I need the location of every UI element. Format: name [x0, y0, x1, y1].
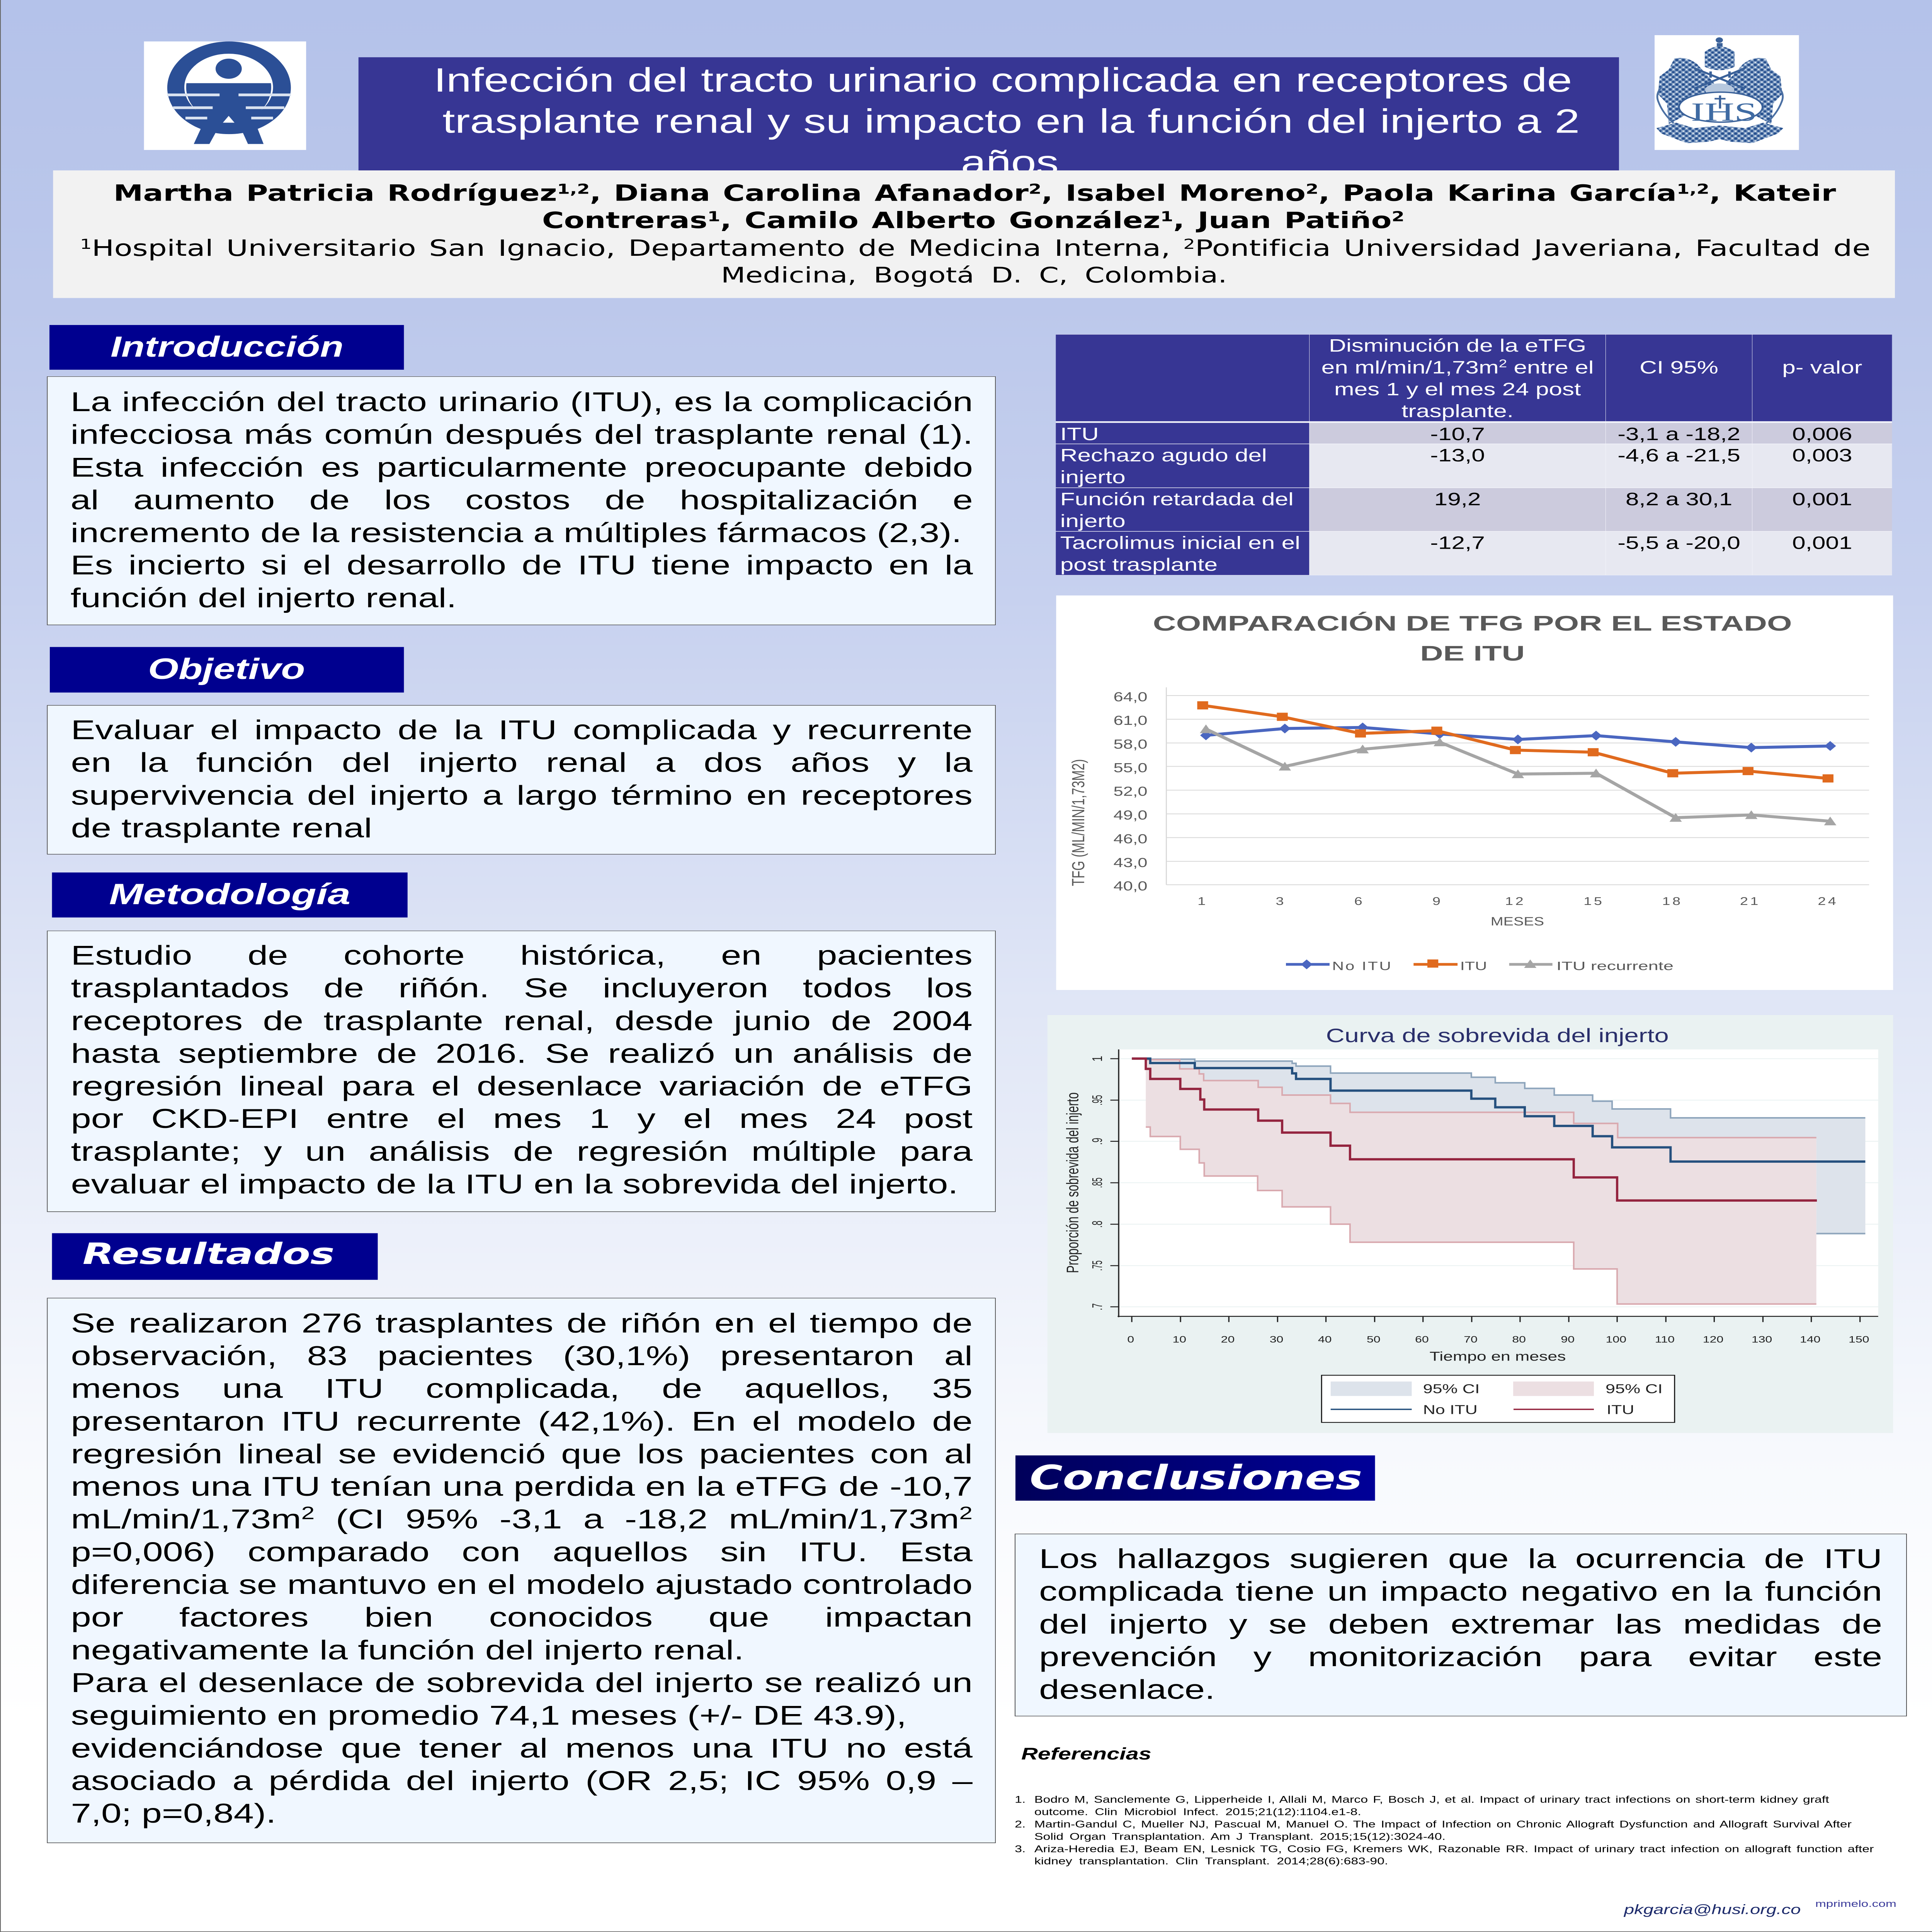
resultados text: observación, 83 pacientes (30,1%) presentaron al — [71, 1340, 973, 1371]
table: disminución de la eTFG: 0,001 — [1792, 489, 1852, 509]
table: disminución de la eTFG: Disminución de la eTFG — [1329, 335, 1586, 355]
table: disminución de la eTFG: Rechazo agudo del — [1060, 445, 1267, 465]
resultados text — [71, 1307, 973, 1830]
survival x tick labels: 60 — [1415, 1334, 1429, 1345]
y axis tick labels: 58,0 — [1114, 737, 1148, 752]
objetivo text: supervivencia del injerto a largo término en receptores — [71, 780, 973, 811]
table: disminución de la eTFG: mes 1 y el mes 24 post — [1334, 379, 1581, 399]
conclusiones text: complicada tiene un impacto negativo en la función — [1039, 1576, 1882, 1607]
x axis title: MESES — [1491, 915, 1544, 928]
y axis tick labels: 55,0 — [1114, 761, 1148, 775]
table: disminución de la eTFG: p- valor — [1782, 357, 1862, 378]
survival y tick labels: .7 — [1089, 1303, 1105, 1310]
objetivo text: Evaluar el impacto de la ITU complicada y recurrente — [71, 714, 973, 745]
survival y tick labels — [1089, 1056, 1105, 1310]
x axis tick labels: 21 — [1740, 895, 1760, 908]
y axis tick labels: 46,0 — [1114, 832, 1148, 846]
references list: 3. — [1015, 1843, 1026, 1854]
survival y tick labels: .85 — [1089, 1178, 1105, 1188]
resultados text: mL/min/1,73m2 (CI 95% -3,1 a -18,2 mL/min/1,73m2 — [71, 1503, 973, 1534]
survival x tick labels: 10 — [1173, 1334, 1186, 1345]
row: rechazo agudo — [1056, 334, 1892, 335]
introducción text: infecciosa más común después del trasplante renal (1). — [71, 419, 973, 450]
table: disminución de la eTFG: -12,7 — [1430, 532, 1485, 553]
metodología text: trasplante; y un análisis de regresión múltiple para — [71, 1136, 973, 1167]
survival legend — [1321, 1375, 1675, 1422]
reference 3 — [1015, 1793, 1895, 1794]
logo: Pontificia Universidad Javeriana crest: IHS — [1691, 98, 1757, 127]
table: disminución de la eTFG: -10,7 — [1430, 424, 1485, 444]
row: tacrolimus — [1056, 334, 1892, 335]
survival x tick labels: 30 — [1270, 1334, 1283, 1345]
survival x tick labels — [1127, 1334, 1869, 1345]
survival x tick labels: 90 — [1561, 1334, 1575, 1345]
series: ITU recurrente — [1206, 729, 1830, 821]
title banner — [359, 57, 1619, 170]
survival y tick labels: .8 — [1089, 1221, 1105, 1228]
chart title: DE ITU — [1420, 641, 1525, 665]
references list: 2. — [1015, 1818, 1026, 1830]
conclusiones text: prevención y monitorización para evitar este — [1039, 1641, 1882, 1672]
survival x tick labels: 100 — [1606, 1334, 1626, 1345]
metodología text — [71, 939, 973, 1201]
metodología text: Estudio de cohorte histórica, en pacientes — [71, 940, 973, 971]
objetivo text: en la función del injerto renal a dos años y la — [71, 747, 973, 778]
survival x tick labels: 140 — [1800, 1334, 1820, 1345]
table: disminución de la eTFG: 0,003 — [1792, 445, 1852, 465]
table: disminución de la eTFG: injerto — [1060, 467, 1126, 487]
metodología text: evaluar el impacto de la ITU en la sobrevida del injerto. — [71, 1169, 958, 1199]
authors and affiliations: Contreras1, Camilo Alberto González1, Juan Patiño2 — [542, 207, 1405, 233]
table: disminución de la eTFG: 0,001 — [1792, 532, 1852, 553]
table: disminución de la eTFG: ITU — [1060, 424, 1099, 444]
x axis tick labels — [1197, 895, 1838, 908]
title banner: Infección del tracto urinario complicada en receptores de — [434, 61, 1572, 99]
y axis tick labels — [1114, 690, 1148, 893]
table: disminución de la eTFG: CI 95% — [1639, 357, 1718, 378]
references list: kidney transplantation. Clin Transplant. 2014;28(6):683-90. — [1034, 1855, 1388, 1867]
conclusiones text — [1039, 1543, 1882, 1706]
conclusiones text: del injerto y se deben extremar las medidas de — [1039, 1609, 1882, 1639]
heading: Metodología — [52, 872, 408, 917]
conclusiones text: Los hallazgos sugieren que la ocurrencia de ITU — [1039, 1543, 1882, 1574]
resultados text: negativamente la función del injerto renal. — [71, 1635, 744, 1665]
panel: conclusiones — [1015, 1534, 1907, 1716]
authors and affiliations — [53, 170, 1895, 298]
panel: objetivo — [47, 705, 996, 854]
introducción text — [71, 386, 973, 615]
introducción text: Es incierto si el desarrollo de ITU tiene impacto en la — [71, 550, 973, 581]
references list: Solid Organ Transplantation. Am J Transplant. 2015;15(12):3024-40. — [1034, 1831, 1446, 1842]
chart legend: ITU recurrente — [1556, 959, 1673, 973]
chart legend — [1286, 959, 1673, 973]
survival x tick labels: 70 — [1464, 1334, 1478, 1345]
authors and affiliations: Martha Patricia Rodríguez1,2, Diana Carolina Afanador2, Isabel Moreno2, Paola Karina García1,2, Kateir — [114, 180, 1836, 206]
logo: Pontificia Universidad Javeriana crest — [1655, 35, 1799, 150]
survival x tick labels: 0 — [1127, 1334, 1134, 1345]
resultados text: asociado a pérdida del injerto (OR 2,5; IC 95% 0,9 – — [71, 1765, 973, 1796]
survival x tick labels: 150 — [1849, 1334, 1869, 1345]
y axis tick labels: 64,0 — [1114, 690, 1148, 704]
table: disminución de la eTFG: Función retardada del — [1060, 489, 1294, 509]
y axis tick labels: 49,0 — [1114, 808, 1148, 823]
survival legend: No ITU — [1423, 1403, 1478, 1417]
objetivo text: de trasplante renal — [71, 813, 372, 843]
references list — [1015, 1793, 1895, 1867]
heading: Resultados: Resultados — [83, 1237, 335, 1271]
objetivo text — [71, 714, 973, 845]
series: ITU — [1203, 705, 1828, 779]
metodología text: regresión lineal para el desenlace variación de eTFG — [71, 1071, 973, 1101]
panel: introducción — [47, 376, 996, 625]
resultados text: menos una ITU complicada, de aquellos, 35 — [71, 1373, 973, 1404]
heading: Resultados — [52, 1233, 378, 1280]
resultados text: p=0,006) comparado con aquellos sin ITU. Esta — [71, 1537, 973, 1567]
metodología text: trasplantados de riñón. Se incluyeron todos los — [71, 973, 973, 1003]
y axis title: TFG (ML/MIN/1,73M2) — [1069, 759, 1088, 886]
heading: Conclusiones: Conclusiones — [1030, 1458, 1362, 1497]
survival x tick labels: 50 — [1367, 1334, 1381, 1345]
introducción text: Esta infección es particularmente preocupante debido — [71, 452, 973, 483]
heading: Introducción: Introducción — [111, 330, 344, 363]
website credit: mprimelo.com — [1815, 1898, 1896, 1909]
x axis tick labels: 18 — [1662, 895, 1683, 908]
table header row — [1056, 334, 1892, 335]
references list: Martin-Gandul C, Mueller NJ, Pascual M, Manuel O. The Impact of Infection on Chronic Allograft Dysfunction and Allograft Survival After — [1034, 1818, 1852, 1830]
authors and affiliations: Medicina, Bogotá D. C, Colombia. — [721, 263, 1227, 287]
panel: resultados — [47, 1298, 996, 1843]
heading: Referencias: Referencias — [1021, 1744, 1151, 1763]
title banner: trasplante renal y su impacto en la función del injerto a 2 — [442, 102, 1580, 140]
survival x tick labels: 40 — [1318, 1334, 1332, 1345]
panel: line chart, comparación de TFG — [1056, 595, 1893, 990]
survival legend: 95% CI — [1423, 1382, 1480, 1396]
references list: 1. — [1015, 1794, 1026, 1805]
table: disminución de la eTFG — [1056, 334, 1892, 575]
survival x axis title: Tiempo en meses — [1430, 1350, 1566, 1364]
survival x tick labels: 120 — [1703, 1334, 1723, 1345]
resultados text: regresión lineal se evidenció que los pacientes con al — [71, 1439, 973, 1469]
resultados text: evidenciándose que tener al menos una ITU no está — [71, 1733, 973, 1764]
introducción text: incremento de la resistencia a múltiples fármacos (2,3). — [71, 517, 962, 548]
logo: Hospital Universitario San Ignacio — [144, 41, 306, 150]
survival y tick labels: 1 — [1089, 1056, 1105, 1061]
contact email: pkgarcia@husi.org.co — [1623, 1901, 1801, 1917]
x axis tick labels: 6 — [1354, 895, 1364, 908]
row: ITU — [1056, 334, 1892, 335]
introducción text: al aumento de los costos de hospitalización e — [71, 485, 973, 515]
affiliations — [53, 170, 1895, 171]
chart title — [1153, 611, 1792, 665]
resultados text: 7,0; p=0,84). — [71, 1798, 276, 1829]
y axis tick labels: 43,0 — [1114, 855, 1148, 870]
reference 1 — [1015, 1793, 1895, 1794]
row: función retardada — [1056, 334, 1892, 335]
series: No ITU — [1206, 728, 1830, 748]
table: disminución de la eTFG: 0,006 — [1792, 424, 1852, 444]
resultados text: seguimiento en promedio 74,1 meses (+/- DE 43.9), — [71, 1700, 906, 1731]
table: disminución de la eTFG: post trasplante — [1060, 554, 1218, 575]
panel: metodología — [47, 930, 996, 1212]
references list: outcome. Clin Microbiol Infect. 2015;21(12):1104.e1-8. — [1034, 1806, 1361, 1817]
survival chart title: Curva de sobrevida del injerto — [1326, 1025, 1669, 1046]
metodología text: hasta septiembre de 2016. Se realizó un análisis de — [71, 1038, 973, 1069]
table: disminución de la eTFG: 19,2 — [1434, 489, 1481, 509]
survival y tick labels: .9 — [1089, 1138, 1105, 1145]
conclusiones text: desenlace. — [1039, 1674, 1215, 1705]
chart title: COMPARACIÓN DE TFG POR EL ESTADO — [1153, 611, 1792, 635]
survival x tick labels: 80 — [1512, 1334, 1526, 1345]
chart legend: ITU — [1460, 959, 1487, 973]
survival x tick labels: 130 — [1752, 1334, 1772, 1345]
survival y tick labels: .95 — [1089, 1095, 1105, 1105]
introducción text: La infección del tracto urinario (ITU), es la complicación — [71, 387, 973, 417]
authors and affiliations: 1Hospital Universitario San Ignacio, Departamento de Medicina Interna, 2Pontificia Universidad Javeriana, Facultad de — [80, 235, 1871, 261]
x axis tick labels: 12 — [1505, 895, 1526, 908]
heading: Introducción — [49, 325, 404, 370]
panel: survival curve, curva de sobrevida del injerto — [1048, 1015, 1893, 1433]
survival x tick labels: 20 — [1221, 1334, 1235, 1345]
metodología text: por CKD-EPI entre el mes 1 y el mes 24 post — [71, 1104, 973, 1134]
resultados text: por factores bien conocidos que impactan — [71, 1602, 973, 1633]
references list: Ariza-Heredia EJ, Beam EN, Lesnick TG, Cosio FG, Kremers WK, Razonable RR. Impact of urinary tract infection on allograft function after — [1034, 1843, 1874, 1854]
heading: Metodología: Metodología — [109, 878, 350, 911]
table: disminución de la eTFG: en ml/min/1,73m2 entre el — [1321, 357, 1594, 378]
y axis tick labels: 52,0 — [1114, 784, 1148, 799]
table: disminución de la eTFG: Tacrolimus inicial en el — [1060, 532, 1300, 553]
heading: Objetivo — [50, 647, 404, 692]
x axis tick labels: 9 — [1432, 895, 1443, 908]
x axis tick labels: 15 — [1583, 895, 1604, 908]
references list: Bodro M, Sanclemente G, Lipperheide I, Allali M, Marco F, Bosch J, et al. Impact of urinary tract infections on short-term kidney graft — [1034, 1794, 1829, 1805]
chart legend: No ITU — [1332, 959, 1391, 973]
table: disminución de la eTFG: -3,1 a -18,2 — [1617, 424, 1740, 444]
x axis tick labels: 24 — [1818, 895, 1838, 908]
table: disminución de la eTFG: -5,5 a -20,0 — [1617, 532, 1740, 553]
survival y tick labels: .75 — [1089, 1260, 1105, 1271]
metodología text: receptores de trasplante renal, desde junio de 2004 — [71, 1005, 973, 1036]
heading: Objetivo: Objetivo — [148, 653, 305, 685]
y axis tick labels: 61,0 — [1114, 714, 1148, 728]
survival y axis title: Proporción de sobrevida del injerto — [1063, 1092, 1082, 1273]
table: disminución de la eTFG: -4,6 a -21,5 — [1617, 445, 1740, 465]
resultados text: presentaron ITU recurrente (42,1%). En el modelo de — [71, 1406, 973, 1437]
resultados text: Para el desenlace de sobrevida del injerto se realizó un — [71, 1667, 973, 1698]
resultados text: diferencia se mantuvo en el modelo ajustado controlado — [71, 1570, 973, 1600]
survival x tick labels: 110 — [1655, 1334, 1675, 1345]
table: disminución de la eTFG: trasplante. — [1401, 401, 1514, 421]
x axis tick labels: 3 — [1276, 895, 1286, 908]
survival curves and confidence bands — [1132, 1059, 1865, 1304]
y axis tick labels: 40,0 — [1114, 879, 1148, 893]
table: disminución de la eTFG: injerto — [1060, 511, 1126, 531]
introducción text: función del injerto renal. — [71, 583, 457, 613]
table: disminución de la eTFG: -13,0 — [1430, 445, 1485, 465]
x axis tick labels: 1 — [1197, 895, 1208, 908]
survival legend: ITU — [1607, 1403, 1634, 1417]
survival legend: 95% CI — [1605, 1382, 1663, 1396]
author names — [53, 170, 1895, 171]
resultados text: menos una ITU tenían una perdida en la eTFG de -10,7 — [71, 1471, 973, 1502]
table: disminución de la eTFG: 8,2 a 30,1 — [1626, 489, 1732, 509]
resultados text: Se realizaron 276 trasplantes de riñón en el tiempo de — [71, 1308, 973, 1338]
reference 2 — [1015, 1793, 1895, 1794]
